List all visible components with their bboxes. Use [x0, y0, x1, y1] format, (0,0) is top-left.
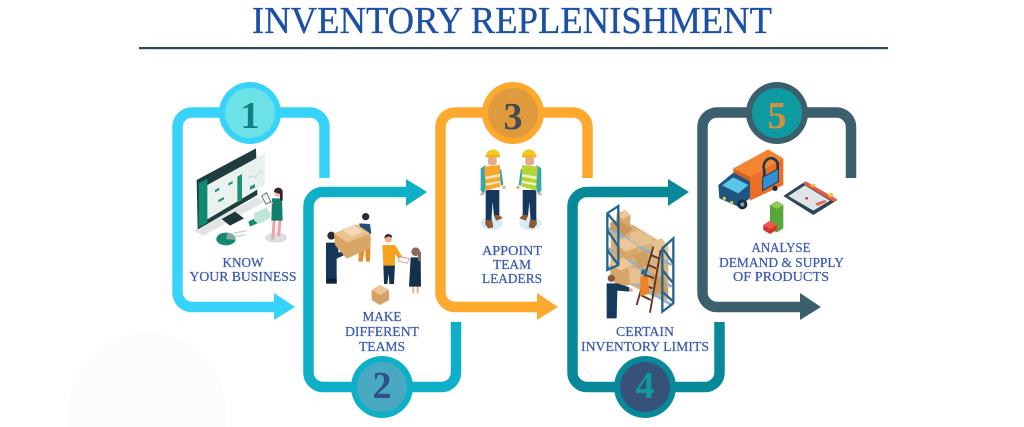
step 5 label: OF PRODUCTS	[733, 270, 829, 285]
step 3	[440, 82, 588, 320]
step 4 arrow path	[572, 179, 720, 387]
step 3 arrow path	[440, 112, 588, 320]
step 1 number badge	[219, 82, 281, 144]
step 5 number badge	[746, 82, 808, 144]
step 3 label: APPOINT	[482, 244, 542, 259]
step 1 label	[190, 256, 296, 285]
step 1	[178, 82, 324, 320]
step 2 arrow path	[308, 179, 456, 387]
step 3 label: LEADERS	[482, 272, 542, 287]
step 2 label: MAKE	[362, 310, 402, 325]
step 2	[308, 179, 456, 418]
step 4 label: CERTAIN	[616, 325, 674, 340]
step 5 label: ANALYSE	[752, 241, 810, 256]
step 1 label: YOUR BUSINESS	[190, 270, 296, 285]
step 3 number badge: 3	[504, 96, 522, 138]
step 5	[702, 82, 851, 320]
icon: two team leaders in hard hats	[480, 149, 542, 230]
icon: warehouse shelves with boxes	[607, 206, 673, 318]
faint background circle	[68, 332, 226, 427]
step 2 label	[345, 310, 419, 355]
title rule	[139, 47, 888, 49]
step 3 label	[482, 244, 542, 287]
left worker	[480, 149, 506, 230]
right worker	[516, 149, 542, 230]
step 5 arrow path	[702, 112, 851, 320]
step 4 label: INVENTORY LIMITS	[581, 340, 709, 355]
step 2 label: DIFFERENT	[345, 325, 419, 340]
icon: team moving boxes	[326, 213, 421, 305]
icon: delivery truck, calendar and bars	[718, 149, 837, 234]
step 2 number badge	[351, 356, 413, 418]
step 1 label: KNOW	[222, 256, 264, 271]
step 5 number badge: 5	[768, 95, 786, 137]
title: INVENTORY REPLENISHMENT	[252, 0, 772, 42]
step 2 number badge: 2	[372, 365, 392, 407]
step 4 label	[581, 325, 709, 355]
step 5 label: DEMAND & SUPPLY	[719, 256, 844, 271]
step 4 number badge: 4	[636, 365, 654, 407]
step 4	[572, 179, 720, 418]
step 1 arrow path	[178, 112, 324, 320]
step 3 label: TEAM	[493, 258, 532, 273]
step 5 label	[719, 241, 844, 285]
step 4 number badge	[614, 356, 676, 418]
step 2 label: TEAMS	[359, 340, 405, 355]
icon: computer dashboard and analyst	[193, 148, 287, 245]
step 3 number badge	[482, 82, 544, 144]
step 1 number badge: 1	[240, 95, 260, 137]
